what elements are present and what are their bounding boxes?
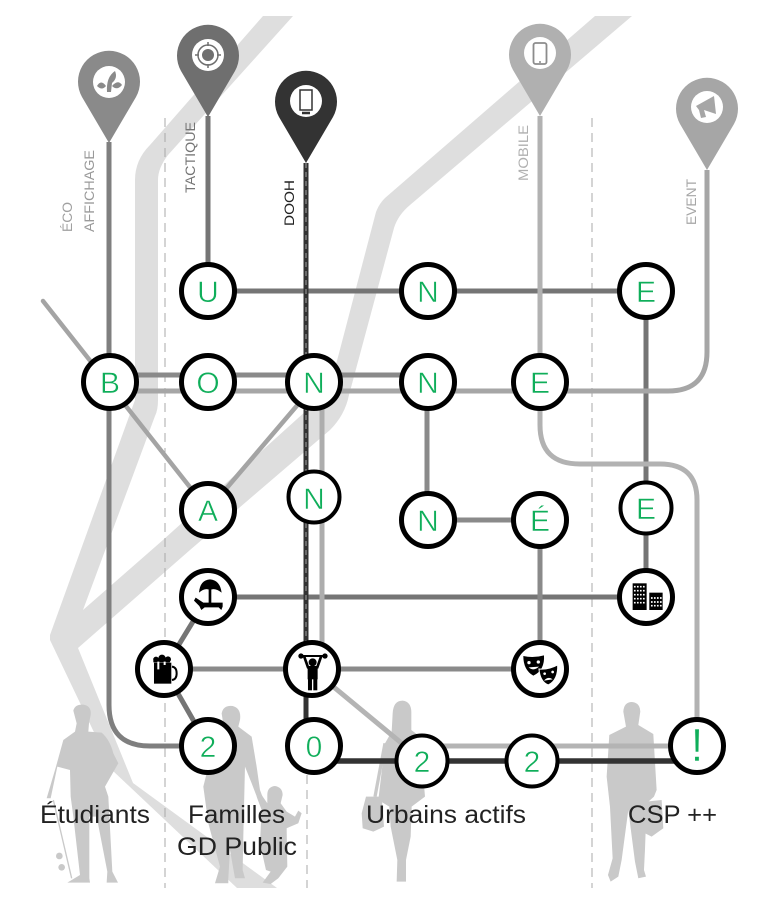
silhouette: urban woman: [362, 701, 425, 882]
pin labels: ÉCO: [59, 202, 75, 232]
station: exclamation: [670, 719, 724, 772]
station: N: N: [417, 367, 439, 400]
station: 0: 0: [306, 731, 322, 764]
pin: DOOH: [275, 71, 337, 163]
station: gym: [286, 642, 338, 696]
line: éco affichage: [109, 142, 208, 746]
station: 2 small: [506, 736, 558, 786]
station: U: [182, 264, 234, 318]
station: N: N: [417, 276, 439, 309]
icon: megaphone: [696, 96, 716, 118]
silhouette: student: [47, 705, 118, 883]
icon: weightlifter: [298, 653, 328, 690]
line: event: [110, 170, 707, 391]
station: 2: 2: [200, 731, 216, 764]
station: U: U: [197, 276, 219, 309]
station: buildings: [620, 570, 672, 624]
pin: éco affichage: [78, 51, 140, 143]
station: E small: [620, 482, 672, 534]
pin labels: AFFICHAGE: [81, 150, 97, 232]
station: N small: N: [303, 483, 325, 516]
pin labels: EVENT: [683, 179, 699, 225]
pin labels: [59, 122, 699, 232]
icon: office buildings: [633, 583, 663, 610]
station: E: [514, 356, 566, 408]
station: N: [402, 494, 454, 546]
station: exclamation: !: [691, 719, 703, 771]
icon: leaves: [97, 71, 122, 92]
station: 2 small: 2: [524, 746, 540, 779]
station: N small: [288, 472, 340, 522]
icon: target: [195, 42, 221, 68]
line: grey spur: [43, 301, 306, 510]
line: mobile: [540, 116, 697, 746]
background transit bands: [50, 16, 632, 888]
station: É: É: [530, 505, 550, 538]
station: E: [620, 264, 672, 318]
line: lower light track: [312, 669, 697, 746]
station: A: [182, 484, 234, 536]
audience label: Urbains actifs: Urbains actifs: [366, 801, 526, 829]
station: E small: E: [636, 493, 656, 526]
line: upper double track: [110, 372, 428, 378]
audience label: Familles GD Public: Familles: [188, 801, 285, 829]
pin: mobile: [509, 24, 571, 116]
pin: tactique: [177, 25, 239, 117]
audience label: CSP ++: CSP ++: [628, 801, 717, 829]
station: N: N: [417, 505, 439, 538]
icon: digital screen: [300, 90, 312, 113]
station: A: A: [198, 495, 218, 528]
station: 0: [288, 720, 340, 772]
icon: beer mug: [153, 655, 177, 684]
station: N: [288, 356, 340, 408]
station: theatre: [514, 642, 566, 696]
silhouette: executive: [607, 702, 663, 882]
station: B: [84, 356, 136, 408]
line: connector network: [164, 382, 540, 669]
audience label: Familles GD Public: GD Public: [177, 833, 297, 861]
icon: beach lounger: [194, 579, 223, 610]
station: O: [182, 356, 234, 408]
station: 2 small: [396, 736, 448, 786]
station: beer: [138, 642, 190, 696]
station: O: O: [196, 367, 220, 400]
station: parasol: [182, 570, 234, 624]
station: É: [514, 494, 566, 546]
icon: smartphone: [534, 43, 546, 64]
line: tactique: [164, 116, 646, 746]
station: N: N: [303, 367, 325, 400]
pin labels: DOOH: [281, 180, 297, 226]
station: B: B: [100, 367, 120, 400]
pin: event: [676, 78, 738, 170]
silhouette: family: [203, 706, 302, 884]
station: 2: [182, 720, 234, 772]
station: N: [402, 264, 454, 318]
icon: theatre masks: [523, 655, 558, 685]
audience label: Familles GD Public: [177, 801, 297, 861]
audience label: Étudiants: Étudiants: [40, 800, 150, 829]
line: second grey vertical: [320, 395, 324, 660]
pin labels: TACTIQUE: [182, 122, 198, 193]
station: E: E: [530, 367, 550, 400]
station: N: [402, 356, 454, 408]
column dividers: [165, 118, 592, 888]
pin labels: MOBILE: [515, 125, 531, 181]
line: DOOH: [306, 163, 697, 761]
station: E: E: [636, 276, 656, 309]
station: 2 small: 2: [414, 746, 430, 779]
